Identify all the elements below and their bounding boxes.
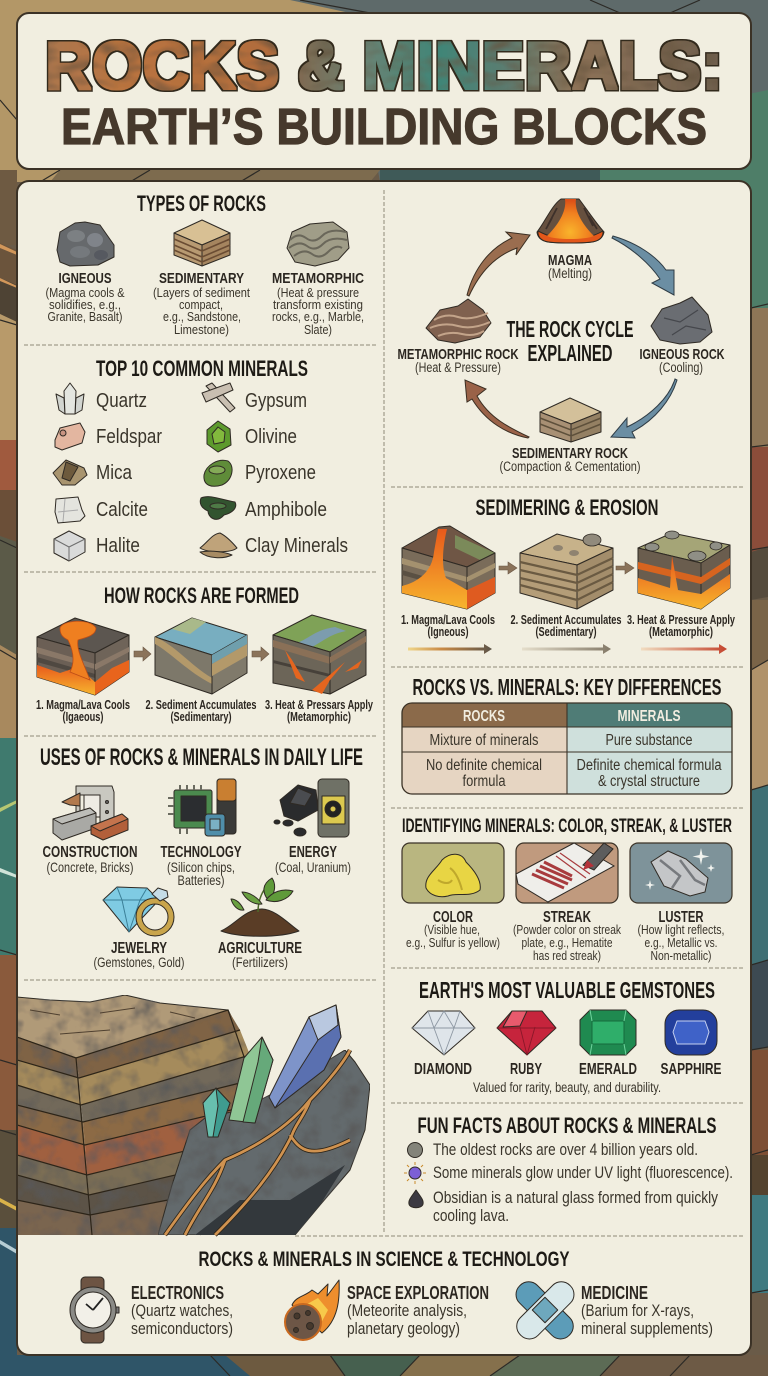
arrow [499,562,517,574]
mineral names [96,390,348,557]
electronics text: semiconductors) [131,1319,233,1338]
arrow: magma to igneous [612,236,674,295]
card labels: e.g., Sulfur is yellow) [406,935,500,950]
illustration: rock strata with crystals [17,995,370,1235]
use labels: JEWELRY [111,940,167,957]
icon: sedimentary rock [540,398,601,442]
crystal: blue [269,1005,341,1108]
heading: how rocks are formed: HOW ROCKS ARE FORMED [104,583,299,608]
icon: emerald [580,1010,636,1055]
arrow [134,647,151,661]
title panel [17,13,751,169]
mineral names: Clay Minerals [245,535,348,557]
card labels: COLOR [433,909,473,926]
captions: (Sedimentary) [170,709,232,724]
crystal: teal [203,1088,230,1137]
icon: jewelry [103,887,171,933]
section: rock cycle [398,199,725,474]
use labels [42,844,351,970]
fact text [433,1140,733,1225]
card: luster [630,843,732,903]
medicine text [581,1283,713,1338]
cycle labels: (Cooling) [659,360,703,375]
captions: (Igneous) [428,624,468,639]
icon: meteor [285,1280,339,1340]
icon: glowing mineral [404,1162,426,1184]
icon: amphibole [200,497,236,519]
sedimentary text: Limestone) [174,322,229,337]
arrow: sedimentary to metamorphic [465,380,529,438]
space exploration text: (Meteorite analysis, [347,1301,467,1320]
arrow [252,647,269,661]
heading: the rock cycle explained: THE ROCK CYCLE [506,316,634,342]
metamorphic text: transform existing [273,297,363,312]
section: fun facts [404,1113,733,1225]
progress arrow: metamorphic [641,644,727,654]
igneous text: (Magma cools & [46,285,125,300]
icon: clay minerals [200,533,237,558]
cycle labels: IGNEOUS ROCK [640,346,725,363]
icon: metamorphic rock [426,299,491,343]
icon: mica [53,460,87,485]
metamorphic text: METAMORPHIC [272,271,364,287]
section: top 10 common minerals [53,356,348,561]
icon: energy [274,779,349,837]
metamorphic text [272,271,364,337]
dark veined rock [158,1050,370,1235]
cycle labels: (Heat & Pressure) [415,360,501,375]
mineral names: Feldspar [96,426,162,448]
gem labels: Valued for rarity, beauty, and durability. [473,1080,661,1095]
metamorphic text: rocks, e.g., Marble, [272,309,364,324]
icon: sedimentary rock [174,220,230,266]
icon: magma volcano [537,199,604,243]
captions: (Metamorphic) [649,624,713,639]
section: identifying minerals [402,815,732,963]
card labels: e.g., Metallic vs. [644,935,718,950]
icon: olivine [207,421,231,452]
gem labels [414,1061,722,1095]
comparison table: formula [462,773,506,790]
captions: (Sedimentary) [536,624,596,639]
section: gemstones [412,977,722,1095]
mineral names: Calcite [96,499,148,521]
captions [401,612,736,639]
card labels: STREAK [543,909,591,926]
card labels: plate, e.g., Hematite [522,935,612,950]
cycle labels: METAMORPHIC ROCK [398,346,519,363]
card labels: (Visible hue, [424,922,480,937]
electronics text: ELECTRONICS [131,1283,224,1303]
section: uses in daily life [40,744,363,970]
captions: (Igaeous) [62,709,104,724]
mineral names: Halite [96,535,140,557]
heading: sedimering and erosion: SEDIMERING & EROSION [476,495,658,520]
section: rocks vs minerals [402,674,732,794]
electronics text: (Quartz watches, [131,1301,233,1320]
section: sedimering and erosion [401,495,736,654]
arrow [616,562,634,574]
use labels: AGRICULTURE [218,940,302,957]
fact text: The oldest rocks are over 4 billion years old. [433,1140,698,1159]
progress arrow: sedimentary [522,644,611,654]
icon: feldspar [55,423,85,450]
icon: old rock [408,1142,422,1158]
space exploration text: planetary geology) [347,1319,460,1338]
comparison table: & crystal structure [598,773,700,790]
section: types of rocks [46,191,364,337]
captions: 2. Sediment Accumulates [510,612,622,627]
use labels: (Concrete, Bricks) [46,859,134,875]
card labels: (How light reflects, [638,922,724,937]
heading: top 10 common minerals: TOP 10 COMMON MINERALS [96,356,308,381]
crystal: green [229,1037,273,1123]
icon: obsidian [409,1190,423,1208]
metamorphic text: Slate) [304,322,332,337]
card labels [406,909,724,963]
icon: igneous rock [57,222,114,266]
heading: the rock cycle explained [506,316,634,366]
igneous text: solidifies, e.g., [49,297,121,312]
gem labels: EMERALD [579,1061,637,1078]
sedimentary text: e.g., Sandstone, [163,309,241,324]
icon: diamond [412,1011,475,1055]
igneous text [46,271,125,324]
gem labels: DIAMOND [414,1061,472,1078]
heading: the rock cycle explained: EXPLAINED [528,340,612,366]
use labels: (Fertilizers) [232,954,288,970]
card labels: has red streak) [533,948,601,963]
use labels: TECHNOLOGY [160,844,242,861]
captions: (Metamorphic) [287,709,351,724]
comparison table: Definite chemical formula [576,757,722,774]
use labels: Batteries) [178,872,224,888]
block: volcano [402,526,495,609]
use labels: (Gemstones, Gold) [94,954,184,970]
use labels: CONSTRUCTION [42,844,138,861]
icon: technology [168,779,236,836]
space exploration text [347,1283,489,1338]
gem labels: SAPPHIRE [660,1061,722,1078]
arrow: metamorphic to magma [467,232,530,296]
block: sediment [155,618,247,694]
icon: agriculture [221,878,299,936]
comparison table: Pure substance [606,732,692,749]
captions: 1. Magma/Lava Cools [36,697,130,712]
fact text: cooling lava. [433,1206,509,1225]
icon: quartz watch [70,1277,119,1343]
icon: ruby [497,1011,556,1055]
captions: 2. Sediment Accumulates [146,697,256,712]
card: streak [516,843,618,903]
progress arrow: igneous [408,644,492,654]
heading: uses of rocks and minerals: USES OF ROCKS & MINERALS IN DAILY LIFE [40,744,363,771]
icon: pyroxene [204,460,232,486]
block: heat and pressure [273,615,366,694]
medicine text: (Barium for X-rays, [581,1301,694,1320]
comparison table: No definite chemical [426,757,542,774]
card labels: LUSTER [658,909,704,926]
comparison table: Mixture of minerals [430,732,539,749]
space exploration text: SPACE EXPLORATION [347,1283,489,1303]
sedimentary text: SEDIMENTARY [159,271,244,287]
icon: gypsum [202,383,235,412]
icon: calcite [55,497,85,523]
icon: igneous rock [651,297,712,344]
arrow: igneous to sedimentary [611,379,677,438]
icon: metamorphic rock [287,222,349,266]
card: color [402,843,504,903]
medicine text: MEDICINE [581,1283,648,1303]
use labels: ENERGY [289,844,337,861]
captions [36,697,374,724]
cycle labels [398,252,725,474]
sedimentary text [153,271,250,337]
heading: science and technology: ROCKS & MINERALS IN SCIENCE & TECHNOLOGY [198,1248,570,1271]
cycle labels: (Compaction & Cementation) [500,459,640,474]
section: science and technology [70,1248,713,1344]
icon: halite [54,531,85,561]
sedimentary text: compact, [179,297,223,312]
use labels: (Coal, Uranium) [275,859,351,875]
captions: 1. Magma/Lava Cools [401,612,495,627]
cycle labels: MAGMA [548,252,592,269]
block: metamorphic [638,531,730,609]
metamorphic text: (Heat & pressure [277,285,359,300]
mineral names: Amphibole [245,499,327,521]
subtitle: EARTH’S BUILDING BLOCKS [61,98,707,155]
medicine text: mineral supplements) [581,1319,713,1338]
captions: 3. Heat & Pressars Apply [265,697,374,712]
igneous text: IGNEOUS [58,271,112,287]
mineral names: Olivine [245,426,297,448]
mineral names: Pyroxene [245,462,316,484]
icon: construction [53,786,128,840]
card labels: Non-metallic) [650,948,712,963]
use labels: (Silicon chips, [167,859,235,875]
mineral names: Gypsum [245,390,307,412]
section: how rocks are formed [36,583,374,724]
igneous text: Granite, Basalt) [48,309,122,324]
heading: types of rocks: TYPES OF ROCKS [137,191,266,216]
icon: medicine bandage [511,1277,579,1344]
icon: quartz [56,383,84,414]
comparison table: ROCKS [463,708,505,725]
card labels: (Powder color on streak [513,922,621,937]
mineral names: Mica [96,462,133,484]
sedimentary text: (Layers of sediment [153,285,250,300]
cycle labels: SEDIMENTARY ROCK [512,445,628,462]
block: magma and lava [37,618,129,695]
icon: sapphire [665,1010,717,1055]
cycle labels: (Melting) [548,266,592,281]
gem labels: RUBY [510,1061,542,1078]
block: layered sediment [520,534,613,609]
electronics text [131,1283,233,1338]
comparison table: MINERALS [618,708,681,725]
comparison table [402,703,732,794]
title: rocks and minerals: ROCKS & MINERALS: [45,28,723,104]
mineral names: Quartz [96,390,147,412]
